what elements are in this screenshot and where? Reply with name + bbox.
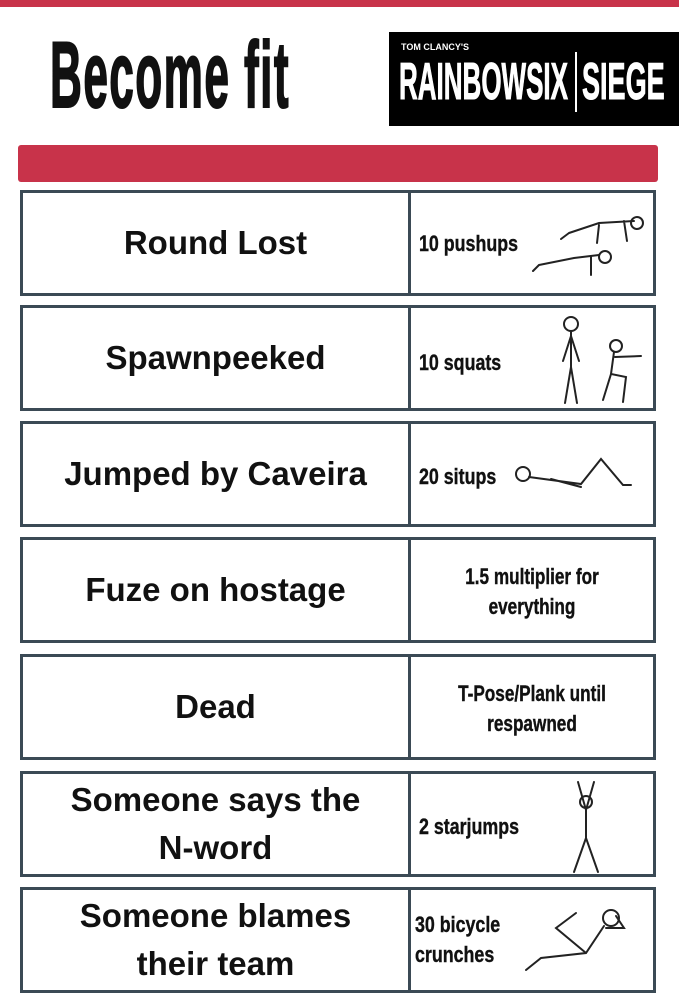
- logo: rainbow six siege: SIEGE: [582, 53, 665, 111]
- row: caveira: [20, 421, 656, 527]
- row: blames team: crunches: [415, 942, 494, 967]
- row: blames team: Someone blames: [80, 897, 351, 934]
- icon: squats: [562, 316, 642, 404]
- row: fuze: Fuze on hostage: [85, 571, 346, 608]
- row: caveira: Jumped by Caveira: [64, 455, 367, 492]
- row: fuze: [20, 537, 656, 643]
- title: Become fit: [50, 22, 290, 127]
- row: spawnpeeked: 10 squats: [419, 350, 501, 375]
- row: round lost: Round Lost: [124, 224, 307, 261]
- row: spawnpeeked: Spawnpeeked: [105, 339, 326, 376]
- row: n-word: 2 starjumps: [419, 814, 519, 839]
- row: fuze: everything: [489, 594, 575, 619]
- icon: situps: [515, 457, 632, 488]
- logo: rainbow six siege: TOM CLANCY'S: [401, 42, 469, 52]
- row: caveira: 20 situps: [419, 464, 496, 489]
- row: spawnpeeked: [20, 305, 656, 411]
- logo: rainbow six siege: [389, 32, 679, 126]
- row: dead: [20, 654, 656, 760]
- icon: pushups: [532, 216, 644, 276]
- row: blames team: their team: [137, 945, 294, 982]
- row: n-word: [20, 771, 656, 877]
- row: round lost: [20, 190, 656, 296]
- row: dead: respawned: [487, 711, 577, 736]
- row: blames team: 30 bicycle: [415, 912, 500, 937]
- row: n-word: Someone says the: [71, 781, 360, 818]
- row: blames team: [20, 887, 656, 993]
- icon: starjumps: [573, 781, 599, 873]
- row: dead: T-Pose/Plank until: [458, 681, 606, 706]
- top red bar: [0, 0, 679, 7]
- row: n-word: N-word: [159, 829, 272, 866]
- red header bar: [18, 145, 658, 182]
- logo: rainbow six siege: RAINBOWSIX: [399, 53, 568, 111]
- row: fuze: 1.5 multiplier for: [465, 564, 599, 589]
- icon: bicycle crunches: [525, 909, 626, 971]
- row: round lost: 10 pushups: [419, 231, 518, 256]
- row: dead: Dead: [175, 688, 256, 725]
